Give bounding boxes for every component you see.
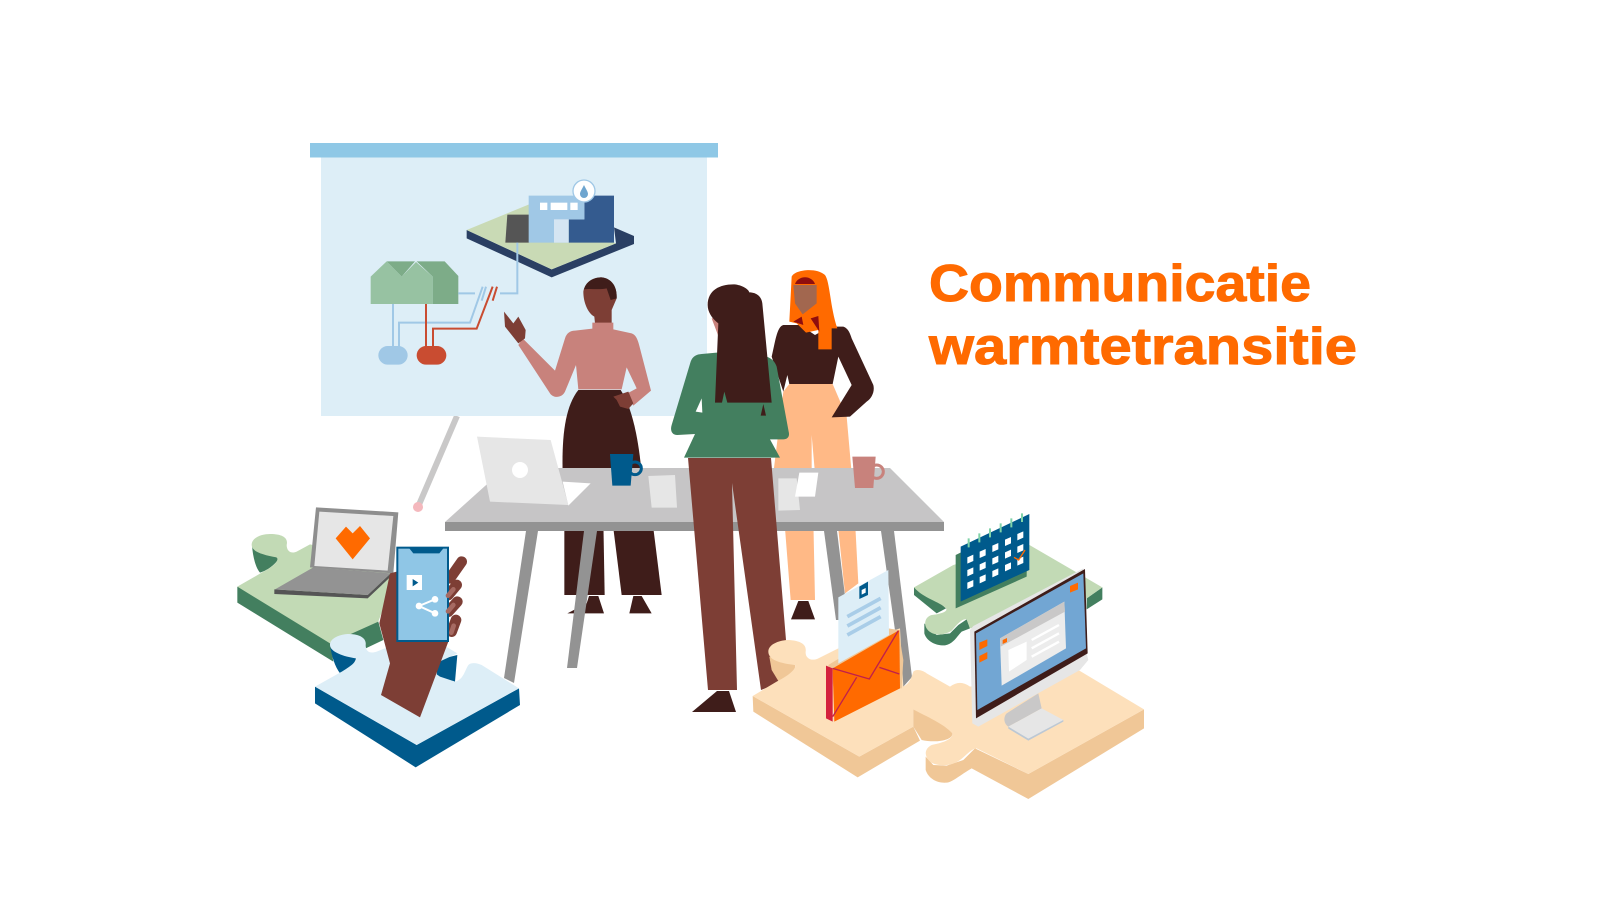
title: warmtetransitie xyxy=(928,318,1357,376)
chart: heat network diagram on screen xyxy=(371,180,634,365)
icon: building on platform xyxy=(467,180,634,277)
panel: projection screen xyxy=(310,143,718,512)
icon: desktop monitor xyxy=(970,568,1088,741)
table xyxy=(445,468,944,687)
puzzle piece: green left with laptop xyxy=(237,507,398,662)
puzzle piece: blue with hand and phone xyxy=(315,548,520,767)
icon: hand holding phone xyxy=(379,548,462,717)
presenter woman xyxy=(504,277,651,473)
icon: wall calendar xyxy=(956,513,1029,608)
woman in headscarf lower legs xyxy=(784,520,858,619)
icon: houses xyxy=(371,261,458,304)
icon: envelope with letter xyxy=(826,570,903,722)
papers on table xyxy=(648,473,818,511)
mug: pink xyxy=(852,457,883,488)
icon: storage tanks xyxy=(378,346,446,365)
presenter legs xyxy=(564,520,662,613)
puzzle piece: green right with calendar xyxy=(914,513,1102,645)
icon: laptop with heart xyxy=(274,507,398,598)
puzzle piece: peach pieces with envelope and monitor xyxy=(753,568,1144,799)
title xyxy=(928,255,1357,376)
heat network pipes xyxy=(393,243,517,347)
mug: blue xyxy=(610,454,641,486)
laptop on table xyxy=(477,437,591,506)
title: Communicatie xyxy=(929,255,1311,313)
woman in headscarf xyxy=(772,270,874,473)
table items: laptop, mugs, papers xyxy=(477,437,883,511)
woman in green seen from behind xyxy=(671,284,789,712)
